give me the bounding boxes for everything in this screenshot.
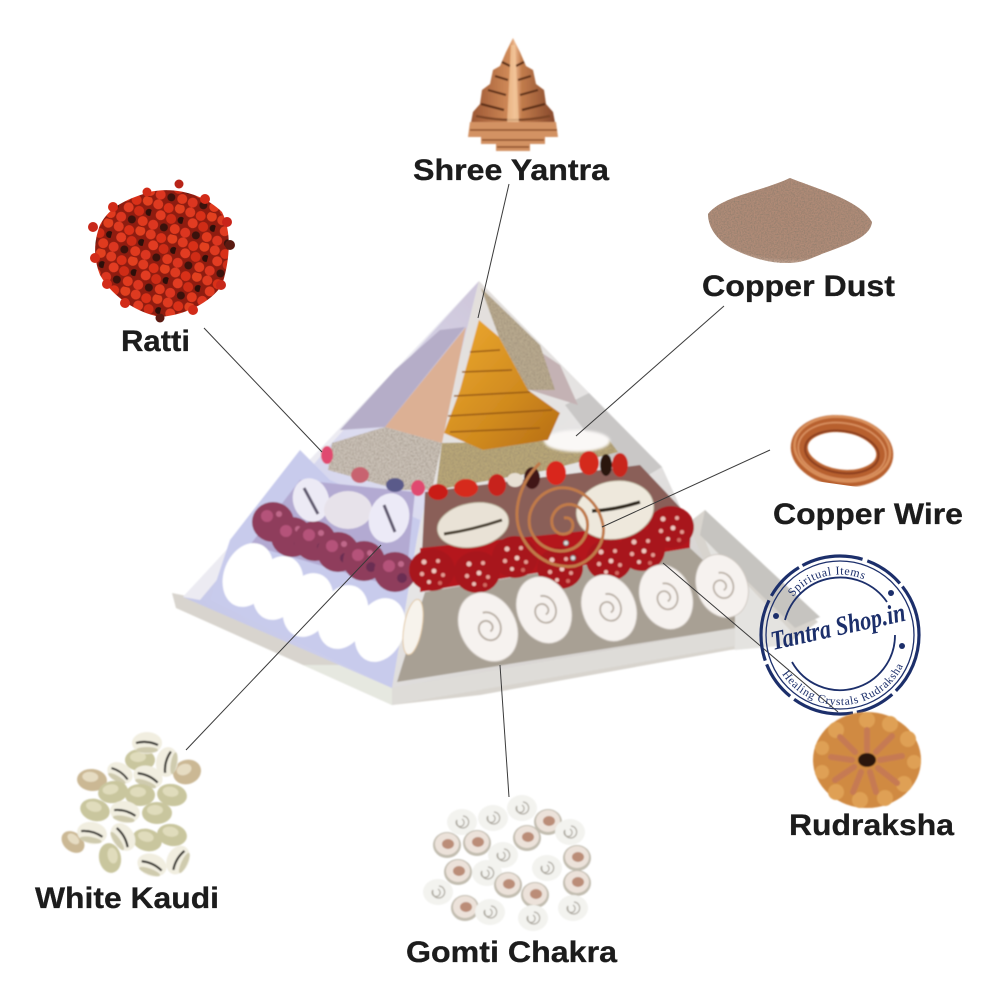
label: White Kaudi: White Kaudi [35,882,219,915]
gomti chakra shells right [446,547,758,672]
white resin highlight [544,430,610,452]
left yantra reflection [385,327,466,443]
icon: copper dust pile [708,178,872,263]
copper spiral [517,463,603,567]
kaudi shells in pyramid [288,474,658,553]
gold shree yantra [444,320,560,450]
label: Copper Dust: Copper Dust [702,270,895,303]
label: Gomti Chakra: Gomti Chakra [406,936,617,969]
label: Shree Yantra: Shree Yantra [413,154,609,187]
icon: ratti seeds [88,180,235,322]
icon: gomti chakra shells [423,795,591,931]
label: Ratti: Ratti [121,325,190,358]
copper dust layer [328,288,618,490]
right face rudraksha [409,506,694,593]
interior behind right beads [420,465,692,592]
pyramid right face [392,281,735,688]
connector lines [186,184,838,797]
icon: rudraksha bead [813,712,921,808]
stamp bottom text: Healing Crystals Rudraksha [782,664,903,707]
pyramid left face [183,281,479,688]
stamp dots [773,613,779,619]
stamp top text: Spiritual Items [788,566,865,596]
gomti chakra shells left [213,535,427,670]
label: Rudraksha: Rudraksha [789,809,954,842]
pyramid base slab [172,510,818,705]
icon: copper wire coil [790,411,894,487]
stamp rings [761,556,919,714]
stamp script text: Tantra Shop.in [768,597,908,656]
icon: white kaudi shells [57,732,205,880]
interior behind left beads [250,480,415,590]
left face rudraksha [252,502,416,592]
icon: shree yantra [468,38,558,151]
pyramid [172,281,820,705]
stamp: Tantra Shop.in [759,554,921,716]
red seeds [321,446,628,500]
label: Copper Wire: Copper Wire [773,498,963,531]
